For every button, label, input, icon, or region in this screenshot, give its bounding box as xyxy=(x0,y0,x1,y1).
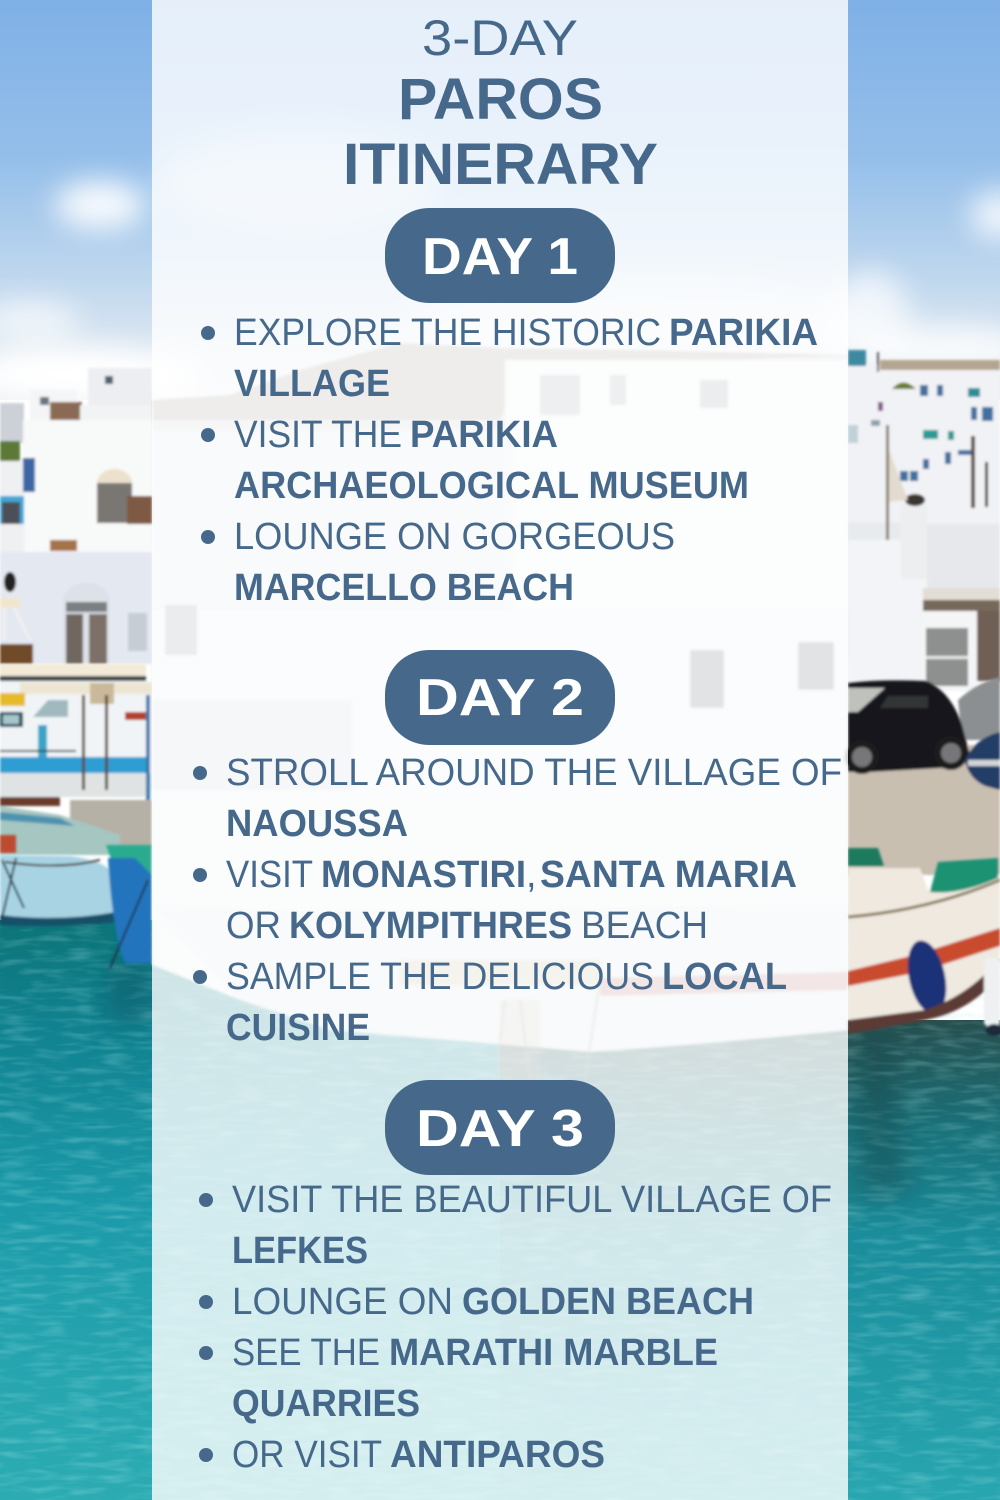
list: day 1 activities: ARCHAEOLOGICAL MUSEUM xyxy=(234,465,749,507)
list: day 3 activities: GOLDEN BEACH xyxy=(462,1281,754,1323)
list: day 3 activities: SEE THE xyxy=(232,1332,380,1374)
list: day 2 activities: SAMPLE THE DELICIOUS xyxy=(226,956,654,998)
pavement and cars xyxy=(845,677,1000,875)
left boats xyxy=(0,664,152,855)
list: day 2 activities: KOLYMPITHRES xyxy=(289,905,572,947)
list: day 2 activities: OR xyxy=(226,905,281,947)
list: day 3 activities: OR VISIT xyxy=(232,1434,382,1476)
list: day 3 activities: QUARRIES xyxy=(232,1383,420,1425)
list: day 2 activities: SANTA MARIA xyxy=(540,854,797,896)
list: day 2 activities xyxy=(193,752,842,1049)
list: day 3 activities: LOUNGE ON xyxy=(232,1281,453,1323)
list: day 2 activities: CUISINE xyxy=(226,1007,370,1049)
list: day 2 activities: MONASTIRI xyxy=(321,854,526,896)
title: PAROS xyxy=(398,67,603,132)
list: day 1 activities xyxy=(201,312,818,609)
sky xyxy=(0,0,1000,400)
list: day 3 activities: MARATHI MARBLE xyxy=(389,1332,718,1374)
list: day 2 activities: STROLL AROUND THE VILLAGE OF xyxy=(226,752,842,794)
list: day 2 activities: NAOUSSA xyxy=(226,803,408,845)
list: day 1 activities: VISIT THE xyxy=(234,414,402,456)
title: 3-DAY xyxy=(422,10,578,66)
list: day 1 activities: PARIKIA xyxy=(410,414,558,456)
list: day 2 activities: LOCAL xyxy=(662,956,787,998)
pill: day 2: DAY 2 xyxy=(416,669,584,727)
list: day 3 activities: LEFKES xyxy=(232,1230,368,1272)
list: day 3 activities: VISIT THE BEAUTIFUL VILLAGE OF xyxy=(232,1179,832,1221)
moored boat xyxy=(848,848,1000,1036)
list: day 1 activities: EXPLORE THE HISTORIC xyxy=(234,312,661,354)
water xyxy=(0,920,1000,1500)
list: day 3 activities: ANTIPAROS xyxy=(390,1434,605,1476)
panel: translucent white column xyxy=(152,0,848,1500)
list: day 1 activities: PARIKIA xyxy=(669,312,818,354)
title: ITINERARY xyxy=(343,132,658,197)
title xyxy=(343,10,658,197)
list: day 2 activities: , xyxy=(526,854,537,896)
pill: day 2 xyxy=(385,650,615,745)
list: day 2 activities: VISIT xyxy=(226,854,313,896)
list: day 1 activities: MARCELLO BEACH xyxy=(234,567,574,609)
pill: day 1 xyxy=(385,208,615,303)
left foreground boat xyxy=(0,835,152,968)
central hill and town xyxy=(152,343,850,800)
list: day 1 activities: LOUNGE ON GORGEOUS xyxy=(234,516,675,558)
right town xyxy=(848,350,1000,691)
pill: day 3: DAY 3 xyxy=(416,1100,584,1158)
central boat xyxy=(152,800,848,1080)
list: day 1 activities: VILLAGE xyxy=(234,363,390,405)
left town xyxy=(0,368,152,664)
list: day 2 activities: BEACH xyxy=(581,905,708,947)
pill: day 3 xyxy=(385,1080,615,1175)
clouds xyxy=(0,130,1000,403)
pill: day 1: DAY 1 xyxy=(422,228,578,286)
list: day 3 activities xyxy=(199,1179,832,1476)
